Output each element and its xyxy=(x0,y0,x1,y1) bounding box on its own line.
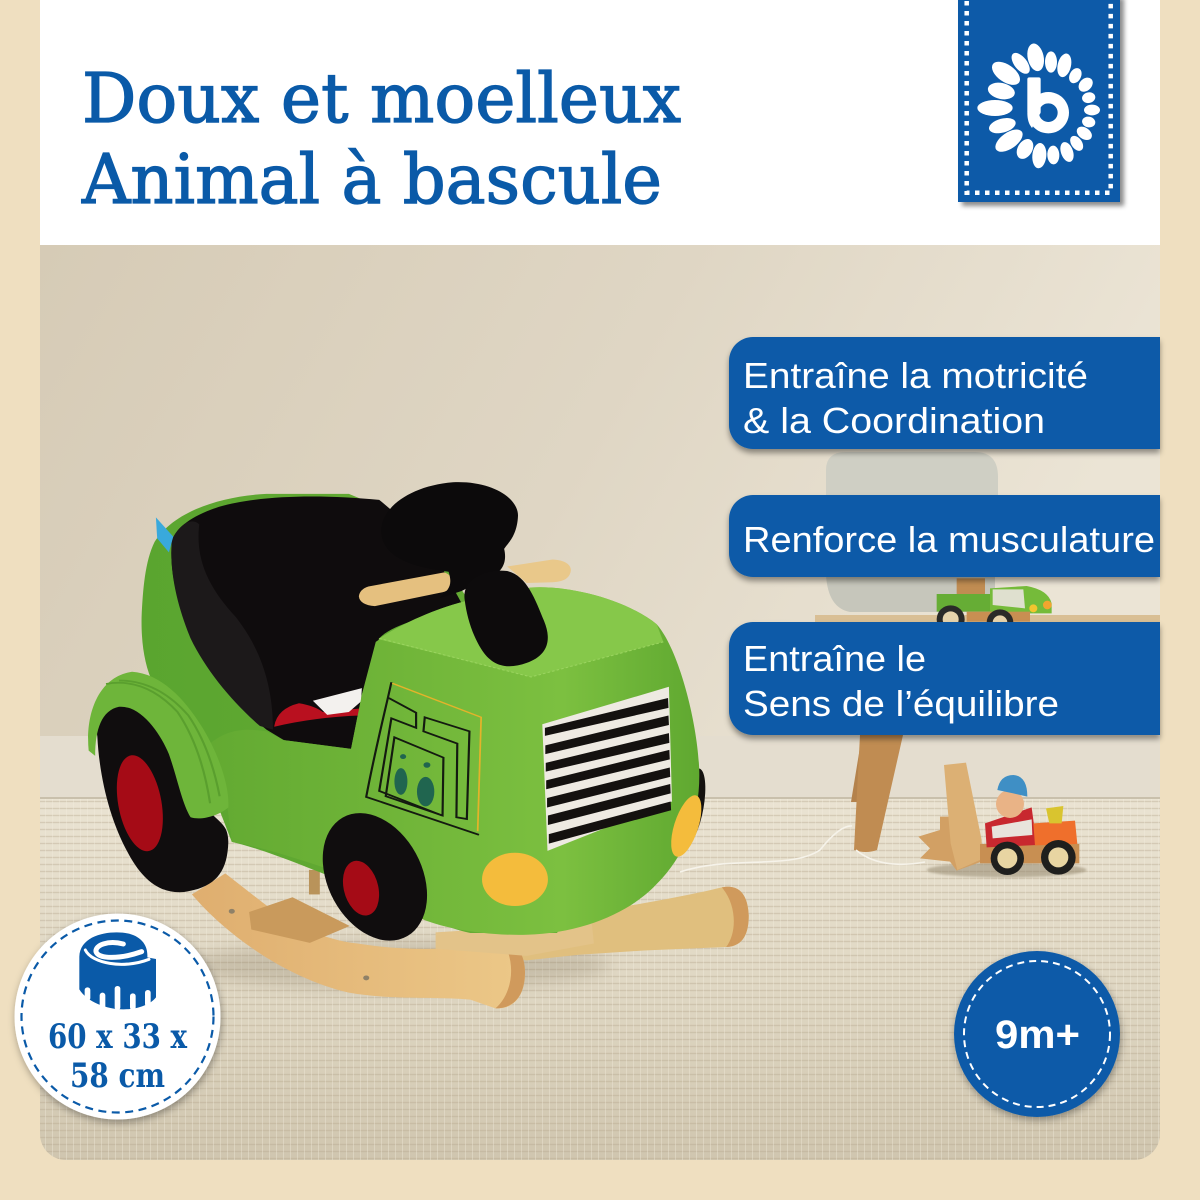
seat bolster shade xyxy=(171,521,273,730)
baseboard xyxy=(40,736,1160,797)
rocking tractor toy xyxy=(88,482,749,1008)
dimensions badge: 60 x 33 x xyxy=(48,1017,188,1057)
door window marks xyxy=(394,754,434,806)
header panel xyxy=(40,0,1160,245)
dimensions badge: 58 cm xyxy=(70,1056,165,1096)
steering head xyxy=(390,482,518,593)
rear fender xyxy=(88,672,228,818)
rear wheel xyxy=(97,698,228,892)
back rocker xyxy=(522,886,749,960)
benefit banner: balance xyxy=(729,622,1160,735)
front rocker end grain xyxy=(496,954,525,1008)
age badge: 9m+ xyxy=(995,1013,1080,1057)
white buckle xyxy=(313,688,362,715)
wall xyxy=(40,245,1160,740)
benefit banner: balance: Sens de l’équilibre xyxy=(743,683,1059,724)
radiator grille xyxy=(542,687,672,851)
icon: measuring tape xyxy=(79,932,156,1010)
blue tag xyxy=(156,517,173,552)
red seat belt xyxy=(274,703,360,727)
brand logo tag xyxy=(958,0,1120,202)
photo panel: nursery scene xyxy=(40,245,1160,1160)
title: Doux et moelleux xyxy=(82,60,681,139)
door stitching xyxy=(366,682,481,835)
front wheel xyxy=(322,813,428,941)
benefit banner: balance: Entraîne le xyxy=(743,638,926,679)
exhaust pipe xyxy=(464,571,548,666)
wooden handle xyxy=(359,559,571,606)
title: Animal à bascule xyxy=(81,141,662,220)
age badge xyxy=(954,951,1120,1117)
dimensions badge xyxy=(14,914,220,1120)
floor shadow under rocker xyxy=(190,941,610,989)
toy forklift xyxy=(918,763,1087,877)
hood and body front xyxy=(210,587,699,935)
stool cushion xyxy=(815,452,1160,622)
front rocker xyxy=(192,873,525,1008)
benefit banner: muscles xyxy=(729,495,1160,577)
benefit banner: motor skills xyxy=(729,337,1160,449)
far wheel xyxy=(696,768,706,834)
benefit banner: muscles: Renforce la musculature xyxy=(743,519,1155,560)
headlights xyxy=(482,793,707,906)
benefit banner: motor skills: Entraîne la motricité xyxy=(743,355,1088,396)
hood top face xyxy=(378,587,663,677)
carpet xyxy=(40,797,1160,1160)
toy truck xyxy=(936,578,1052,622)
title xyxy=(81,60,681,220)
rocker cross bars xyxy=(229,870,594,980)
pull string xyxy=(680,826,925,872)
body shell xyxy=(142,494,558,933)
rider seat xyxy=(171,496,462,749)
benefit banner: motor skills: & la Coordination xyxy=(743,400,1045,441)
back rocker end grain xyxy=(722,887,749,947)
stool legs xyxy=(851,735,903,852)
hood seam xyxy=(379,638,663,677)
